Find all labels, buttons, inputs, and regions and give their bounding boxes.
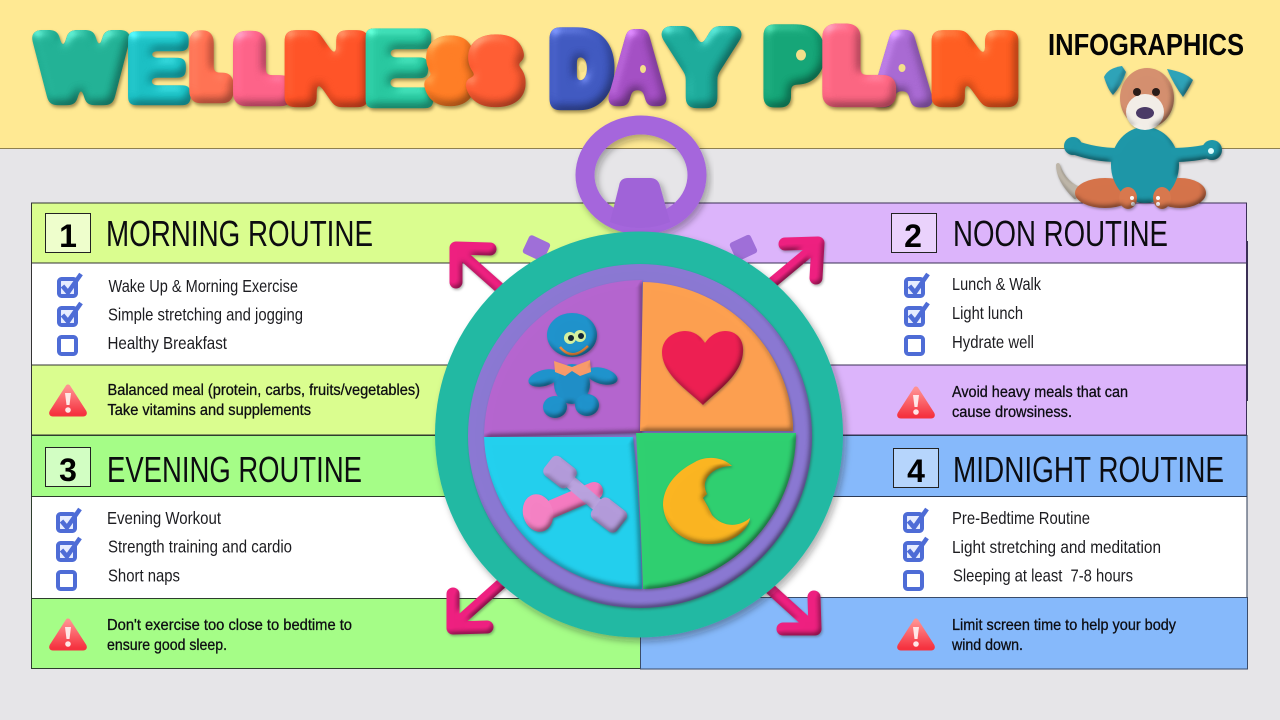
quadrant: green with moon — [636, 433, 796, 589]
tip: evening: Don't exercise too close to bedtime to — [107, 617, 352, 634]
tip: midnight: Limit screen time to help your body — [952, 617, 1176, 634]
stopwatch inner ring — [468, 264, 812, 608]
panel: midnight routine — [640, 436, 1248, 669]
arrow: top left — [456, 248, 502, 290]
checklist: evening — [58, 508, 292, 589]
arrow: top right — [773, 243, 818, 282]
title: wellness day plan — [39, 12, 1017, 126]
title: wellness day plan: A — [612, 18, 663, 119]
tip: midnight: wind down. — [951, 637, 1023, 654]
label: infographics: INFOGRAPHICS — [1048, 27, 1244, 62]
title: wellness day plan: W — [39, 18, 123, 117]
heading: noon routine: NOON ROUTINE — [953, 213, 1168, 254]
stopwatch loop and crown — [585, 125, 697, 228]
tip: evening: ensure good sleep. — [107, 637, 227, 654]
checklist: noon: Lunch & Walk — [952, 274, 1041, 294]
warning icon: morning — [52, 387, 84, 414]
tip: noon: cause drowsiness. — [952, 404, 1072, 421]
header band — [0, 0, 1280, 148]
checklist: midnight: Pre-Bedtime Routine — [952, 508, 1090, 528]
checklist: morning: Simple stretching and jogging — [108, 304, 303, 324]
checklist: midnight: Light stretching and meditation — [952, 537, 1161, 557]
quadrant: orange with heart — [640, 282, 793, 431]
heading: evening routine: EVENING ROUTINE — [107, 449, 362, 490]
checklist: midnight: Sleeping at least 7-8 hours — [953, 566, 1133, 586]
title: wellness day plan: L — [194, 27, 227, 108]
icon: crescent moon — [663, 458, 750, 544]
title: wellness day plan: L — [828, 15, 887, 115]
arrow: bottom left — [453, 583, 502, 628]
checklist: noon: Light lunch — [952, 303, 1023, 323]
title: wellness day plan: N — [286, 19, 367, 120]
icon: smiling clay figure — [526, 313, 620, 418]
tip: morning: Take vitamins and supplements — [108, 402, 311, 419]
checklist: evening: Short naps — [108, 566, 180, 586]
tip: noon — [952, 384, 1128, 421]
quadrant: purple with character — [484, 280, 642, 437]
icon: dumbbells — [519, 453, 630, 535]
number badge 1 — [46, 214, 90, 254]
arrow: bottom right — [768, 587, 815, 629]
number badge 1: 1 — [59, 218, 77, 254]
title: wellness day plan: P — [766, 13, 820, 118]
tip: morning: Balanced meal (protein, carbs, fruits/vegetables) — [108, 382, 420, 399]
tip: morning — [108, 382, 420, 419]
warning icon: midnight — [900, 621, 932, 648]
checklist: noon: Hydrate well — [952, 332, 1034, 352]
quadrant: cyan with dumbbells — [484, 437, 642, 589]
title: wellness day plan: E — [364, 12, 432, 126]
checklist: evening: Evening Workout — [107, 508, 221, 528]
checklist: midnight — [905, 508, 1161, 589]
number badge 3: 3 — [59, 452, 77, 488]
warning icon: evening — [52, 621, 84, 648]
side buttons — [522, 234, 758, 262]
number badge 4: 4 — [907, 453, 925, 489]
title: wellness day plan: S — [470, 24, 522, 117]
stopwatch outer ring — [435, 232, 843, 638]
number badge 3 — [46, 448, 90, 488]
checklist: noon — [906, 274, 1041, 354]
title: wellness day plan: S — [428, 26, 472, 115]
checklist: evening: Strength training and cardio — [108, 536, 292, 556]
panel: noon routine — [640, 203, 1248, 435]
title: wellness day plan: L — [239, 26, 285, 112]
number badge 2: 2 — [904, 218, 922, 254]
title letter holes — [578, 50, 906, 73]
title: wellness day plan: A — [875, 18, 929, 120]
title: wellness day plan: Y — [668, 14, 735, 121]
stopwatch illustration — [435, 125, 843, 638]
number badge 4 — [894, 448, 938, 489]
checklist: morning — [59, 274, 303, 354]
title: wellness day plan: D — [552, 16, 610, 121]
heading: morning routine: MORNING ROUTINE — [106, 213, 373, 254]
checklist: morning: Wake Up & Morning Exercise — [108, 276, 298, 296]
tip: noon: Avoid heavy meals that can — [952, 384, 1128, 401]
tip: midnight — [951, 617, 1176, 654]
title: wellness day plan: N — [933, 19, 1017, 120]
number badge 2 — [892, 214, 936, 254]
checklist: morning: Healthy Breakfast — [108, 333, 227, 353]
title: wellness day plan: E — [126, 16, 190, 120]
panel: morning routine — [32, 203, 640, 435]
panel: evening routine — [32, 436, 640, 668]
warning icon: noon — [900, 389, 932, 416]
yoga dog mascot — [1058, 66, 1222, 209]
tip: evening — [107, 617, 352, 654]
icon: heart — [662, 331, 743, 405]
